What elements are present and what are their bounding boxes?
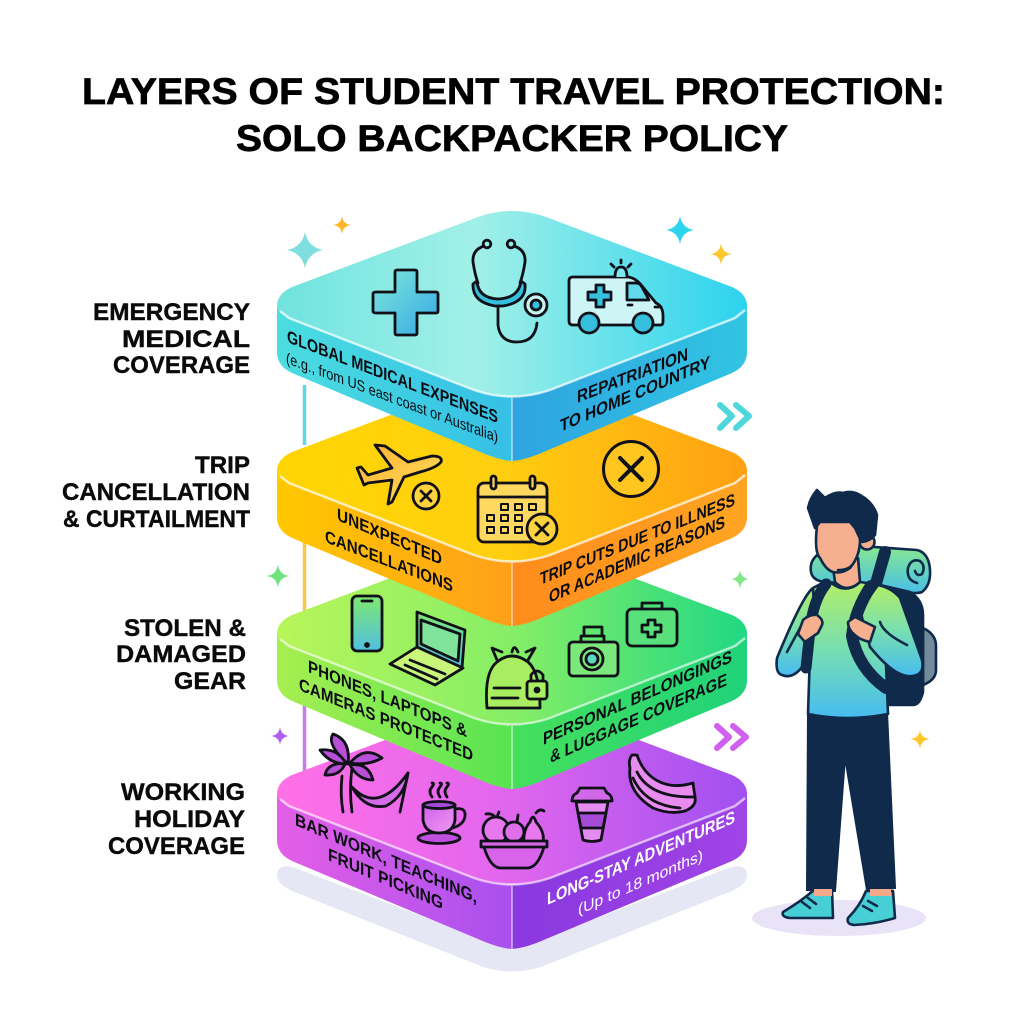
ground shadow bbox=[752, 900, 926, 936]
illustration: backpacker bbox=[752, 490, 936, 936]
icon: stethoscope bbox=[473, 240, 547, 342]
icon: medical bag bbox=[627, 603, 677, 646]
shoes bbox=[783, 889, 895, 925]
text: bar work: BAR WORK, TEACHING, bbox=[295, 809, 477, 907]
icon: backpack with lock bbox=[486, 648, 547, 708]
icon: palm and hammock bbox=[320, 734, 408, 812]
icon: fruit bowl bbox=[481, 810, 547, 868]
icon: camera bbox=[569, 627, 618, 676]
text: personal belongings: & LUGGAGE COVERAGE bbox=[550, 669, 727, 767]
label: emergency medical coverage bbox=[93, 299, 250, 379]
text: phones laptops cameras: PHONES, LAPTOPS & bbox=[308, 657, 467, 741]
icon: medical cross bbox=[373, 270, 438, 335]
label: stolen and damaged gear: DAMAGED bbox=[116, 641, 246, 668]
icon: calendar with x bbox=[478, 476, 557, 544]
backpack bbox=[860, 585, 936, 705]
label: working holiday coverage: HOLIDAY bbox=[134, 806, 245, 833]
stack shadow bbox=[277, 866, 747, 972]
title: SOLO BACKPACKER POLICY bbox=[236, 117, 788, 159]
shirt bbox=[777, 580, 923, 718]
title: LAYERS OF STUDENT TRAVEL PROTECTION: bbox=[82, 70, 945, 112]
text: bar work: FRUIT PICKING bbox=[328, 844, 443, 913]
head bbox=[808, 490, 877, 588]
label: emergency medical coverage: MEDICAL bbox=[122, 326, 250, 353]
label: trip cancellation and curtailment: CANCELLATION bbox=[62, 479, 250, 506]
text: unexpected cancellations: CANCELLATIONS bbox=[325, 527, 453, 596]
text: unexpected cancellations: UNEXPECTED bbox=[337, 504, 442, 569]
panel: emergency medical layer bbox=[277, 211, 747, 461]
label: emergency medical coverage: COVERAGE bbox=[113, 352, 250, 379]
text: long-stay adventures bbox=[547, 806, 735, 919]
icon: laptop bbox=[390, 612, 465, 685]
sparkles bbox=[266, 216, 930, 749]
label: stolen and damaged gear: STOLEN & bbox=[124, 615, 246, 642]
icon: takeaway cup bbox=[572, 788, 612, 842]
text: repatriation: REPATRIATION bbox=[577, 344, 688, 407]
straps bbox=[806, 584, 886, 688]
panel: stolen gear layer bbox=[277, 539, 747, 789]
label: working holiday coverage: WORKING bbox=[121, 779, 245, 806]
text: long-stay adventures: LONG-STAY ADVENTURES bbox=[547, 806, 735, 909]
icon: plane with x bbox=[357, 445, 441, 509]
label: trip cancellation and curtailment: & CURTAILMENT bbox=[63, 506, 250, 533]
connector line bbox=[303, 385, 306, 775]
icon: bananas bbox=[629, 755, 695, 812]
label: emergency medical coverage: EMERGENCY bbox=[93, 299, 250, 326]
chevron: purple bbox=[717, 726, 746, 748]
text: trip cuts: TRIP CUTS DUE TO ILLNESS bbox=[540, 490, 735, 589]
text: repatriation: TO HOME COUNTRY bbox=[560, 351, 710, 436]
panel: trip cancellation layer bbox=[277, 376, 747, 626]
text: personal belongings: PERSONAL BELONGINGS bbox=[543, 646, 732, 749]
label: stolen and damaged gear bbox=[116, 615, 246, 695]
icon: cancel circle bbox=[604, 442, 658, 496]
icon: ambulance bbox=[569, 260, 663, 333]
panel: working holiday layer bbox=[277, 699, 747, 949]
text: long-stay adventures: (Up to 18 months) bbox=[578, 847, 703, 919]
label: working holiday coverage: COVERAGE bbox=[108, 833, 245, 860]
title bbox=[82, 70, 945, 159]
text: global medical expenses: (e.g., from US east coast or Australia) bbox=[286, 349, 498, 446]
icon: phone bbox=[352, 596, 382, 651]
label: trip cancellation and curtailment bbox=[62, 452, 250, 533]
icon: coffee cup bbox=[418, 783, 465, 844]
label: stolen and damaged gear: GEAR bbox=[174, 668, 246, 695]
label: working holiday coverage bbox=[108, 779, 245, 860]
legs bbox=[807, 712, 895, 891]
chevron: teal bbox=[720, 405, 749, 428]
label: trip cancellation and curtailment: TRIP bbox=[195, 452, 250, 479]
text: unexpected cancellations bbox=[325, 504, 453, 596]
hands bbox=[798, 615, 875, 642]
bedroll bbox=[811, 546, 930, 593]
text: phones laptops cameras: CAMERAS PROTECTED bbox=[299, 675, 473, 765]
text: trip cuts: OR ACADEMIC REASONS bbox=[549, 511, 725, 607]
text: global medical expenses: GLOBAL MEDICAL EXPENSES bbox=[287, 327, 498, 427]
